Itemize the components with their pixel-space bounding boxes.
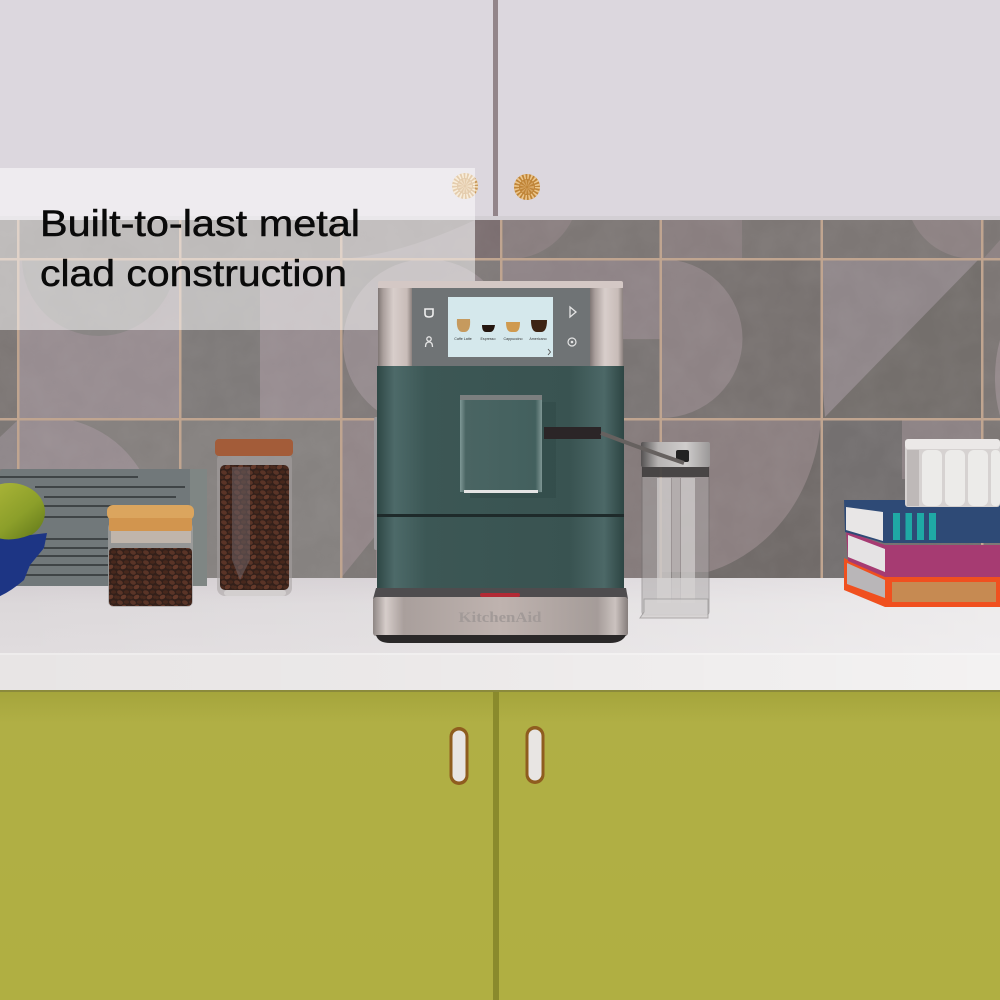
handle left	[450, 727, 468, 785]
heading	[40, 203, 360, 294]
heading: clad construction	[40, 253, 347, 294]
lower cabinets	[0, 692, 1000, 1000]
apple	[0, 483, 45, 541]
cup: cappuccino	[506, 322, 520, 332]
icon: cup	[425, 309, 433, 317]
short coffee bean jar	[107, 505, 194, 607]
carafe lid	[641, 442, 710, 467]
grout lines	[0, 220, 1000, 578]
brand name: KitchenAid	[458, 610, 542, 626]
ridged stone tray	[0, 469, 207, 586]
top cap	[378, 281, 623, 289]
handle right	[526, 726, 544, 784]
drink labels: Espresso	[481, 337, 495, 341]
tube port	[676, 450, 689, 462]
milk carafe	[601, 433, 710, 618]
cup: caffe latte	[457, 319, 470, 332]
translucent text panel	[0, 168, 475, 330]
next chevron	[548, 349, 550, 355]
cabinet knobs	[452, 173, 540, 200]
tile row 2 shapes	[18, 259, 1000, 427]
side handle	[374, 417, 378, 550]
carafe glass	[642, 465, 709, 615]
body seam	[377, 514, 624, 517]
chrome column left	[378, 288, 412, 366]
marble box	[905, 439, 1000, 507]
upper body	[377, 366, 624, 515]
bottom book	[844, 558, 1000, 607]
top book	[844, 500, 1000, 543]
heading: Built-to-last metal	[40, 203, 360, 244]
icon: person	[426, 337, 432, 347]
tiled backsplash	[0, 220, 1000, 578]
tile row 1 shapes	[341, 220, 1000, 259]
lid band	[642, 466, 709, 477]
cup: americano	[531, 320, 547, 332]
tile mottling	[0, 220, 1000, 578]
icon: stop	[568, 338, 576, 346]
carafe highlights	[657, 478, 695, 603]
stainless base	[373, 597, 628, 636]
milk tube connector	[544, 427, 601, 439]
knob right	[514, 174, 540, 200]
chrome column right	[590, 288, 623, 366]
cup: espresso	[482, 325, 495, 332]
spout shadow	[470, 402, 556, 498]
coffee machine	[373, 281, 628, 643]
drink labels: Americano	[529, 337, 547, 341]
stacked books	[844, 500, 1000, 607]
base dark top	[373, 588, 628, 599]
control panel	[412, 288, 590, 366]
countertop	[0, 578, 1000, 692]
touch screen	[448, 297, 553, 357]
carafe base	[640, 599, 708, 618]
drink labels: Cappuccino	[504, 337, 522, 341]
tile row 3 shapes	[0, 419, 982, 578]
tall coffee bean jar	[215, 439, 293, 596]
coffee spout cover	[460, 395, 542, 493]
knob left	[452, 173, 478, 199]
icon: play	[570, 307, 576, 317]
milk tube	[601, 433, 684, 463]
lower body drawer	[377, 516, 624, 588]
bowl	[0, 533, 47, 597]
base foot	[376, 635, 626, 643]
upper cabinets	[0, 0, 1000, 220]
drink labels: Caffe Latte	[454, 337, 472, 341]
drink labels	[454, 337, 547, 341]
middle book	[846, 531, 1000, 577]
base indicator light	[480, 593, 520, 597]
apple in blue bowl	[0, 483, 47, 597]
